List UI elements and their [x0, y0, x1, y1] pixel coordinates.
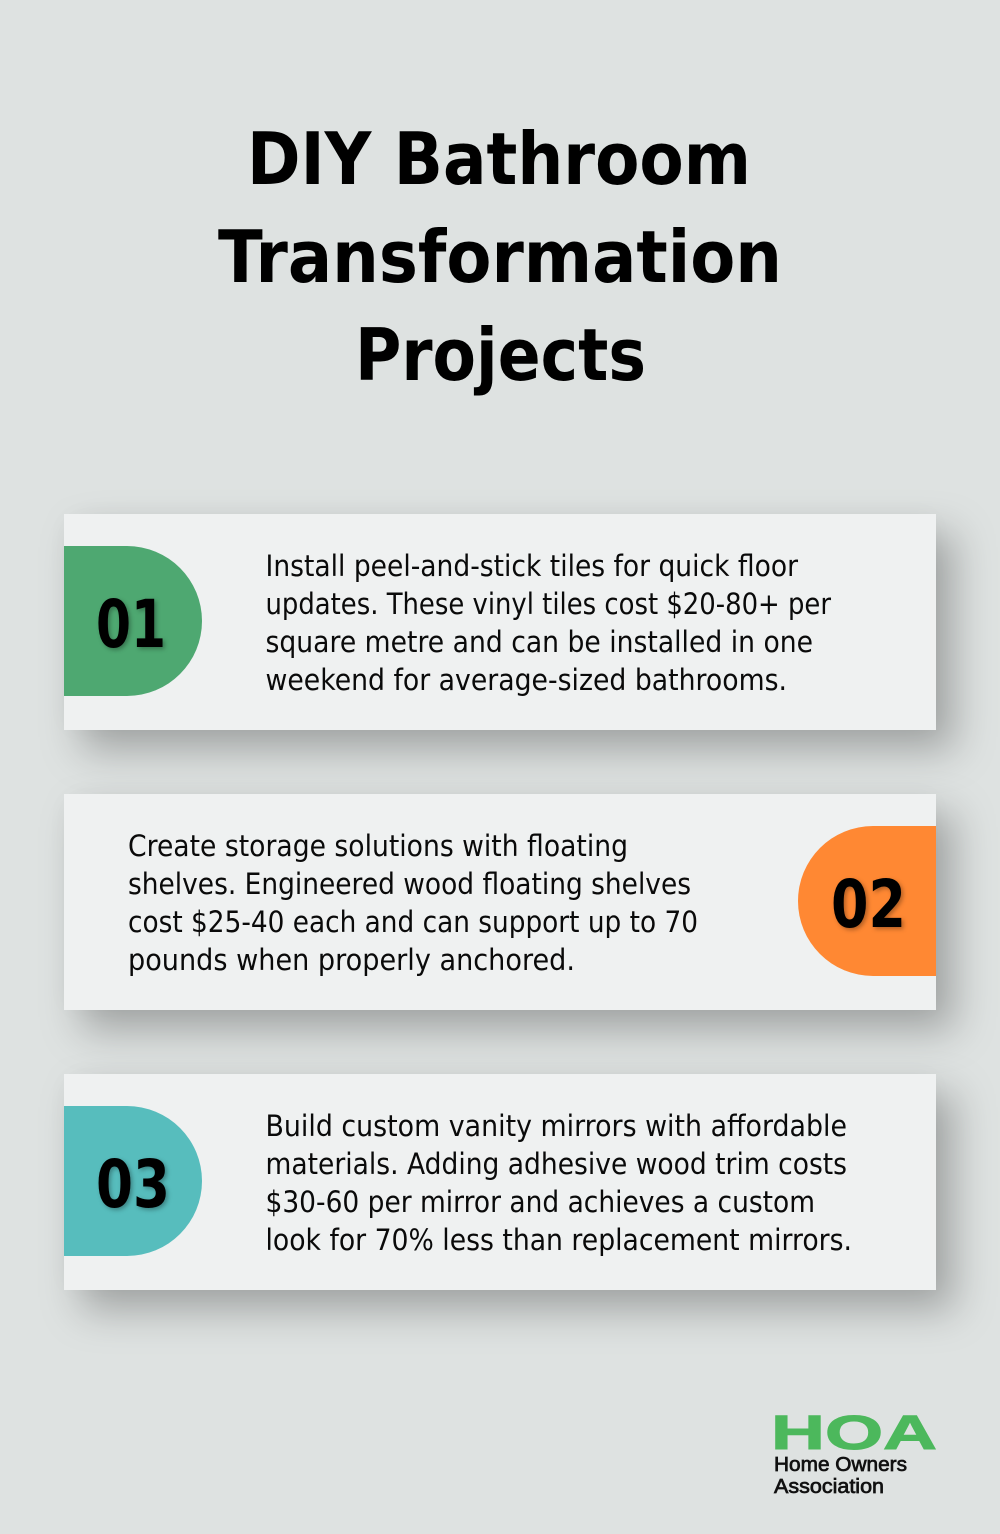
text block 01 [266, 549, 832, 697]
logo: HOA Home Owners Association: Association [774, 1476, 884, 1498]
number 01: 01 [96, 586, 166, 663]
number badge 02 [798, 826, 936, 976]
text block 02: pounds when properly anchored. [128, 943, 575, 977]
number badge 03 [64, 1106, 202, 1256]
number 02: 02 [831, 866, 906, 943]
text block 03: Build custom vanity mirrors with affordable [266, 1109, 847, 1143]
number badge 01 [64, 546, 202, 696]
text block 02: shelves. Engineered wood floating shelves [128, 867, 691, 901]
title: Projects [355, 313, 646, 397]
text block 01: square metre and can be installed in one [266, 625, 813, 659]
text block 02 [128, 829, 698, 977]
panel: step 02 [64, 794, 936, 1010]
number 03: 03 [96, 1146, 170, 1223]
logo: HOA Home Owners Association: HOA [771, 1407, 937, 1460]
panel: step 03 [64, 1074, 936, 1290]
card background 03 [64, 1074, 936, 1290]
card background 01 [64, 514, 936, 730]
text block 03: materials. Adding adhesive wood trim costs [266, 1147, 847, 1181]
text block 02: Create storage solutions with floating [128, 829, 628, 863]
logo: HOA Home Owners Association: Home Owners [774, 1454, 907, 1476]
card background 02 [64, 794, 936, 1010]
title: DIY Bathroom [247, 117, 751, 201]
text block 01: updates. These vinyl tiles cost $20-80+ per [266, 587, 832, 621]
panel: step 01 [64, 514, 936, 730]
title: Transformation [218, 215, 782, 299]
text block 03: $30-60 per mirror and achieves a custom [266, 1185, 815, 1219]
text block 01: Install peel-and-stick tiles for quick floor [266, 549, 799, 583]
logo: HOA Home Owners Association [771, 1407, 937, 1498]
title [218, 117, 782, 397]
text block 03 [266, 1109, 852, 1257]
text block 02: cost $25-40 each and can support up to 70 [128, 905, 698, 939]
text block 01: weekend for average-sized bathrooms. [266, 663, 787, 697]
text block 03: look for 70% less than replacement mirrors. [266, 1223, 852, 1257]
